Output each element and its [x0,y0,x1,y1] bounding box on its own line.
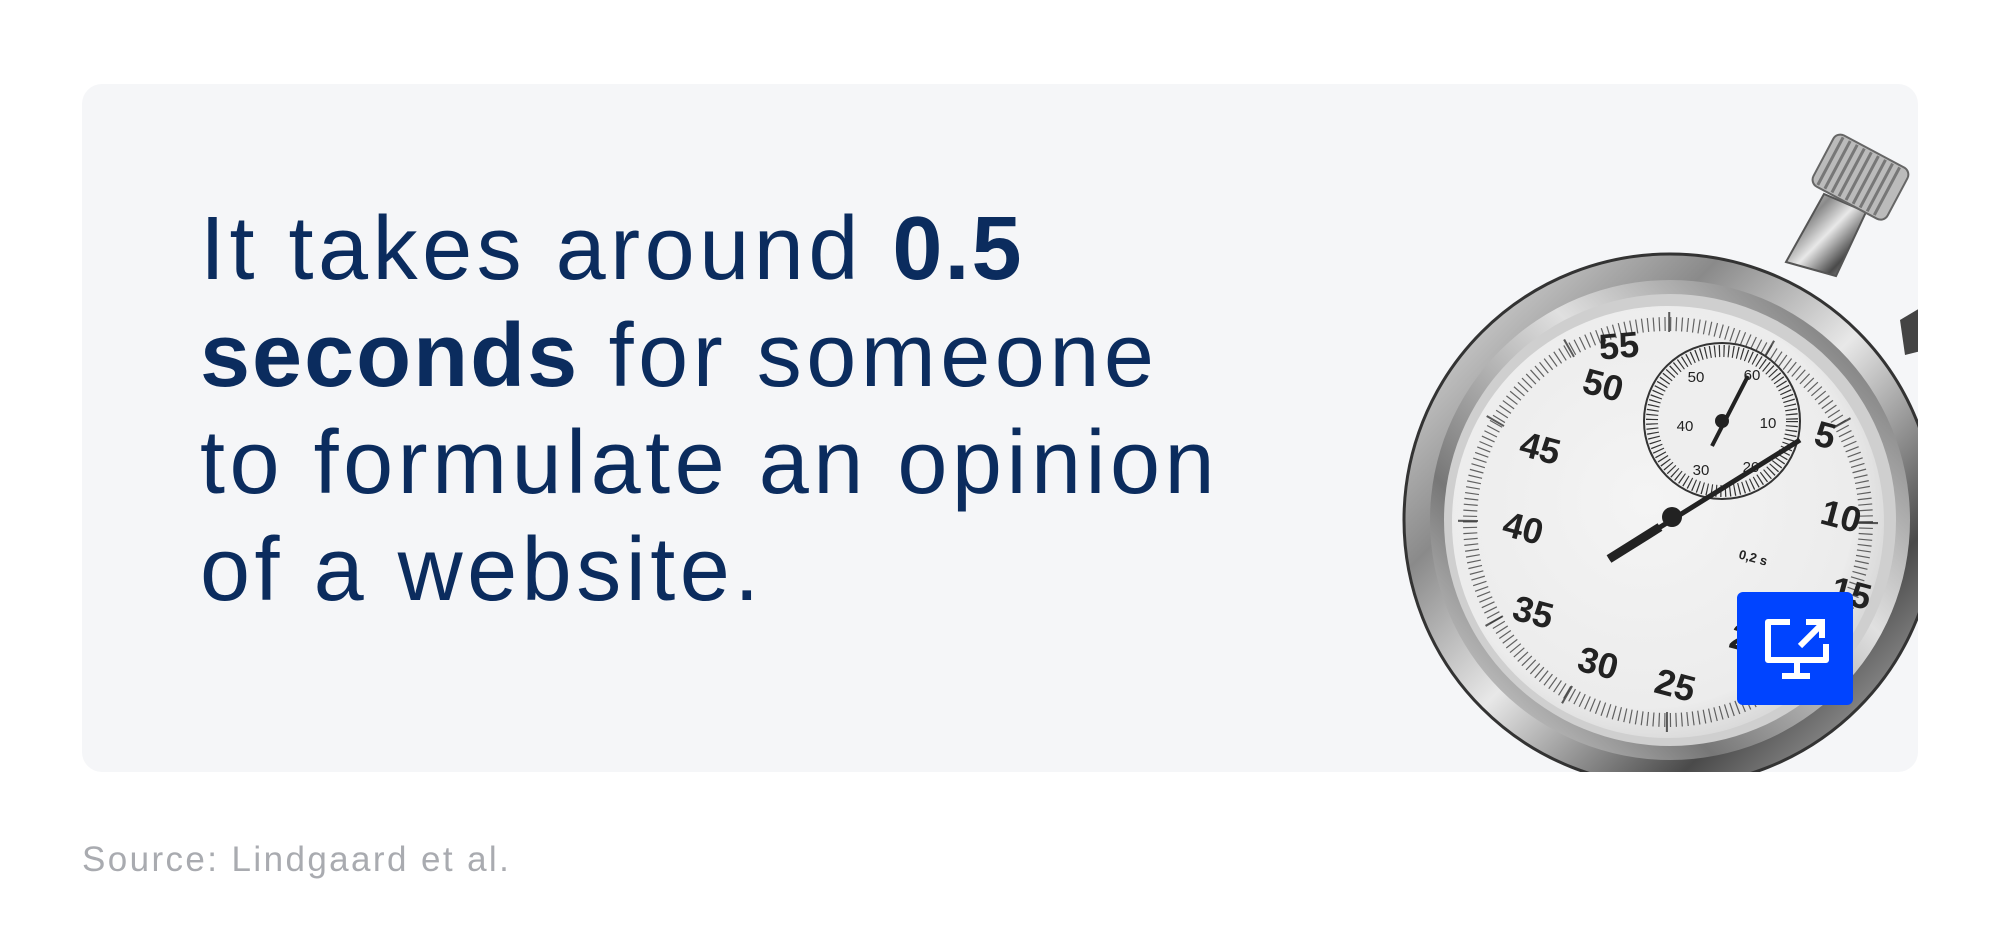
dial numbers: 15 [1827,568,1876,618]
sub dial: 50 [1688,369,1704,386]
dial face [1452,306,1884,738]
dial numbers: 10 [1817,491,1866,541]
sub dial: 20 [1743,459,1759,476]
stopwatch illustration [1402,134,1918,772]
dial numbers: 35 [1509,587,1558,637]
dial numbers: 5 [1810,413,1840,457]
headline text: seconds for someone [200,306,1158,406]
dial numbers [1499,323,1876,710]
dial numbers: 45 [1516,423,1565,473]
headline text: It takes around 0.5 [200,199,1024,299]
second hand [1609,440,1800,559]
source note: Source: Lindgaard et al. [82,840,511,879]
dial numbers: 0,2 s [1737,547,1769,569]
dial numbers: 20 [1726,615,1775,665]
sub dial: 40 [1677,418,1693,435]
sub dial: 30 [1693,462,1709,479]
sub dial: 60 [1744,367,1760,384]
dial numbers: 55 [1597,323,1641,368]
dial numbers: 30 [1574,638,1623,688]
dial numbers: 25 [1651,660,1700,710]
headline text [200,199,1219,620]
dial numbers: 50 [1579,360,1628,410]
icon: crown stem [1786,132,1925,355]
sub dial [1644,343,1800,499]
dial numbers: 40 [1499,503,1548,553]
sub dial: 10 [1760,415,1776,432]
panel: main card [82,84,1918,772]
stopwatch case [1404,254,1936,786]
headline text: of a website. [200,520,764,620]
headline text: to formulate an opinion [200,413,1219,513]
icon: blue monitor badge [1737,592,1853,705]
